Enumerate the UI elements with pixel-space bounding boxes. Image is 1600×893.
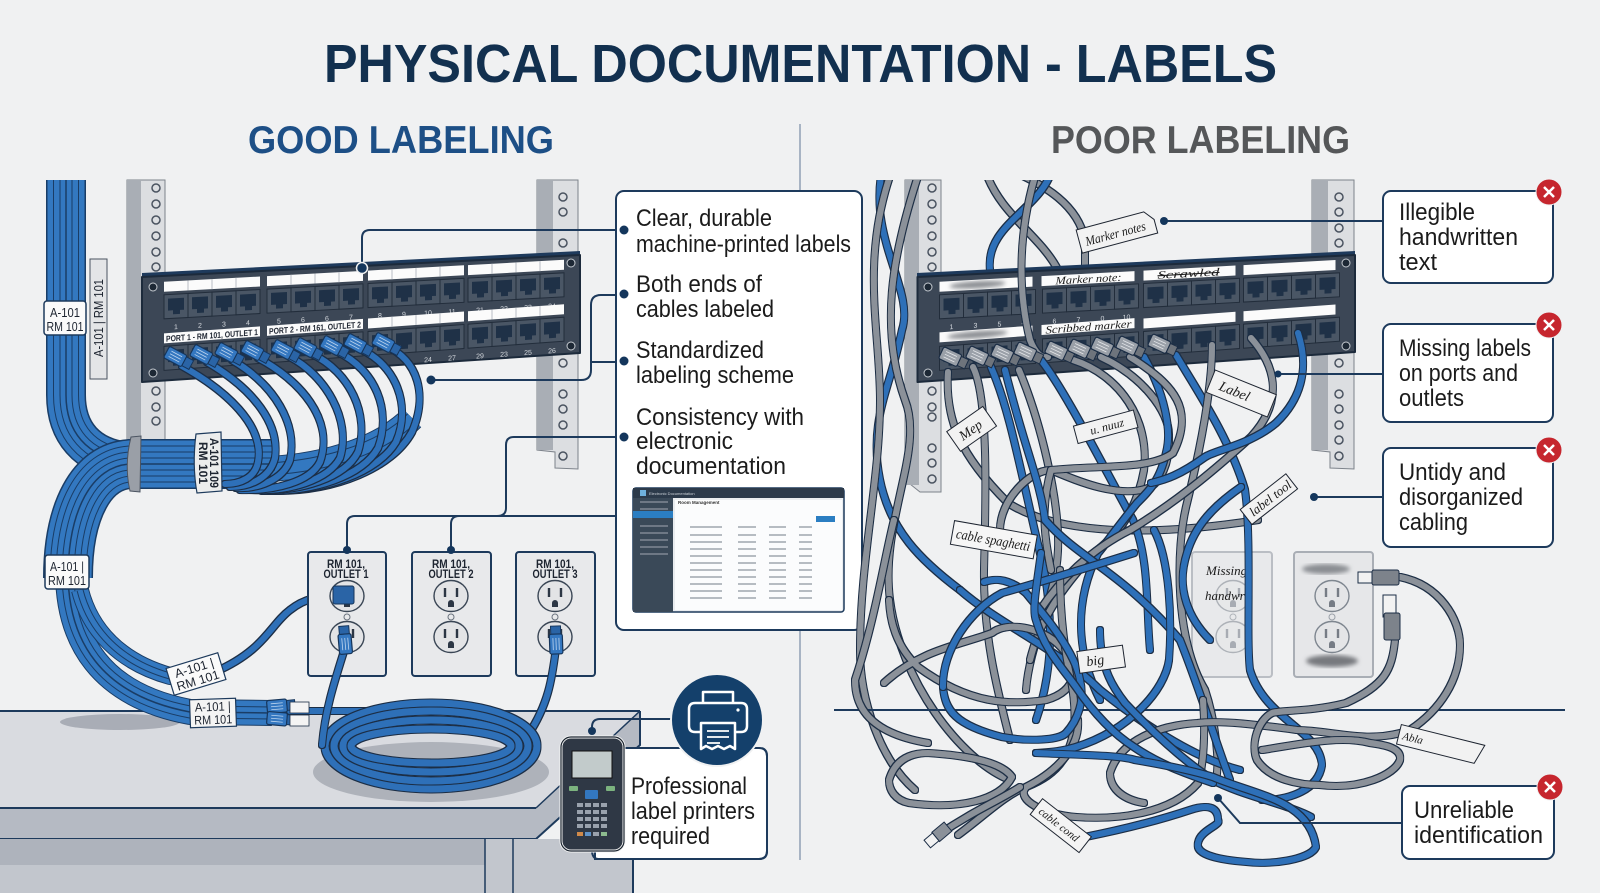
software screenshot thumbnail <box>633 488 844 612</box>
patch panel, poor side <box>917 251 1355 382</box>
callout: good labeling points: Consistency with <box>636 404 804 431</box>
outlets, poor side <box>1192 552 1373 677</box>
vertical cable bundle <box>66 175 130 462</box>
bottom port row <box>164 304 564 383</box>
patch panel, poor side: 4 <box>1022 320 1026 327</box>
tag: mep <box>947 406 997 451</box>
top port row: 6 <box>325 316 329 323</box>
patch panel, poor side: Scribbed marker <box>1046 318 1132 337</box>
handwritten tags <box>947 210 1485 853</box>
callout: unreliable identification: identification <box>1414 822 1543 849</box>
leader dots, good side <box>343 262 455 554</box>
loose plugs right outlet <box>1358 570 1400 640</box>
bottom port row: 29 <box>476 353 484 361</box>
callout: illegible handwritten text: Illegible <box>1399 199 1475 226</box>
top port row: 11 <box>448 309 456 316</box>
cable flag label A: A-101 | <box>173 656 215 681</box>
tag: floor label <box>1397 725 1485 765</box>
floor line <box>834 709 1565 711</box>
tag: label tool: label tool <box>1246 477 1295 519</box>
tag: big <box>1077 645 1125 673</box>
top port row: 3 <box>222 321 226 329</box>
callout: professional label printers: label printers <box>631 798 755 825</box>
callout: untidy cabling: disorganized <box>1399 484 1523 511</box>
icon: printer <box>671 674 763 766</box>
rack rail right, poor side <box>1312 180 1354 469</box>
callout: illegible handwritten text: handwritten <box>1399 224 1518 251</box>
patch panel, poor side: 10 <box>1123 314 1130 322</box>
leader lines, good side <box>347 230 624 550</box>
icon: red x badge 1 <box>1536 179 1562 205</box>
outlet 1 <box>308 552 386 676</box>
outlet 3 <box>516 552 595 676</box>
tag: marker notes: Marker notes <box>1083 218 1147 249</box>
wrap label on vertical bundle <box>44 301 86 335</box>
wrap label on lower bundle: RM 101 <box>48 574 86 588</box>
callout: unreliable identification <box>1402 786 1554 859</box>
callout: missing labels: on ports and <box>1399 360 1518 387</box>
top port row: 1 <box>174 324 178 331</box>
outlet 2: OUTLET 2 <box>428 569 474 581</box>
top port row: 21 <box>476 307 484 315</box>
tag: cable conn: cable cond <box>1036 806 1082 845</box>
callout: untidy cabling: cabling <box>1399 509 1468 536</box>
rotated bundle label: RM 101 <box>196 442 210 484</box>
patch panel, poor side: 0 <box>1101 316 1105 323</box>
outlets, poor side: Missing <box>1205 563 1248 578</box>
tangled cables <box>855 170 1460 863</box>
horizontal cable bundle <box>68 418 412 713</box>
callout: missing labels: outlets <box>1399 385 1464 412</box>
callout: professional label printers: required <box>631 823 710 850</box>
outlet 3: OUTLET 3 <box>532 569 578 581</box>
callout: good labeling points: electronic <box>636 428 733 455</box>
callout: good labeling points: labeling scheme <box>636 362 794 389</box>
tag: scrawl: u. nuuz <box>1088 415 1126 438</box>
tag: scrawl <box>1073 410 1138 443</box>
title: PHYSICAL DOCUMENTATION - LABELS <box>324 34 1277 94</box>
tag: mep: Mep <box>956 418 986 445</box>
tag: label <box>1206 370 1276 417</box>
cable to outlet 1 <box>215 596 335 672</box>
callout: unreliable identification: Unreliable <box>1414 797 1514 824</box>
callout: untidy cabling: Untidy and <box>1399 459 1506 486</box>
desk <box>0 711 640 893</box>
callout: illegible handwritten text: text <box>1399 249 1437 276</box>
top port row: 6 <box>301 317 305 324</box>
cable flag label A <box>166 653 226 695</box>
faded outlet <box>1192 552 1272 677</box>
cables behind panel <box>860 170 1085 790</box>
software screenshot thumbnail: Room Management <box>678 500 720 505</box>
cable flag label B <box>190 698 236 728</box>
cable flag label B: A-101 | <box>195 699 231 715</box>
tag: cable conn <box>1030 799 1091 853</box>
cable flag label B: RM 101 <box>194 712 233 728</box>
callout: good labeling points: Both ends of <box>636 271 762 298</box>
patch panel, poor side: 7 <box>1077 317 1081 324</box>
RJ45 plugs on patch panel <box>163 332 402 371</box>
smudged outlet <box>1294 552 1373 677</box>
tag: cable spaghetti: cable spaghetti <box>955 527 1031 555</box>
patch panel, good side <box>142 251 580 383</box>
patch cables looping into bundle <box>182 346 420 491</box>
wall outlet plates, good side <box>308 552 595 676</box>
patch panel, poor side: 3 <box>974 323 978 330</box>
bottom port row: PORT 1 - RM 101, OUTLET 1 <box>166 327 258 344</box>
bottom port row: 23 <box>500 351 508 359</box>
top port row: 5 <box>277 318 281 326</box>
wrap label on vertical bundle: A-101 <box>50 306 80 320</box>
callout: good labeling points: machine-printed labels <box>636 231 851 258</box>
top port row: 4 <box>246 320 250 327</box>
rotated bundle label: A-101 109 <box>207 438 221 488</box>
icon: red x badge 3 <box>1536 437 1562 463</box>
leader dots, poor side <box>1160 217 1318 802</box>
bottom port row: 25 <box>524 350 532 357</box>
bottom port row: 26 <box>548 348 556 355</box>
outlet 3: RM 101, <box>536 559 574 571</box>
rack rail left, poor side <box>905 180 941 492</box>
callout: missing labels <box>1383 324 1553 422</box>
heading: good labeling: GOOD LABELING <box>248 119 554 162</box>
callout: good labeling points <box>616 191 862 630</box>
callout: missing labels: Missing labels <box>1399 335 1531 362</box>
center divider <box>799 124 801 860</box>
callout: untidy cabling <box>1383 448 1553 547</box>
vertical printed label: A-101 | RM 101 <box>92 279 106 357</box>
top port row: 23 <box>524 305 532 312</box>
callout: good labeling points: Standardized <box>636 337 764 364</box>
bottom port row: 27 <box>448 355 456 363</box>
leader lines, poor side <box>1164 221 1403 823</box>
software screenshot thumbnail: Electronic Documentation <box>649 491 695 496</box>
rack rail left, good side <box>127 180 165 442</box>
top port row: 24 <box>548 303 556 311</box>
wrap label on lower bundle: A-101 | <box>50 560 84 574</box>
outlet 2: RM 101, <box>432 559 470 571</box>
patch panel, poor side: Marker note: <box>1054 272 1122 287</box>
tag: floor label: Abla <box>1400 730 1425 747</box>
printer leader <box>592 719 674 731</box>
bottom port row: 24 <box>424 357 432 364</box>
patch panel, poor side: 1 <box>950 324 954 331</box>
top port row: 2 <box>198 323 202 330</box>
outlets, poor side: handwri <box>1205 588 1249 603</box>
bottom port row: PORT 2 - RM 161, OUTLET 2 <box>269 320 361 336</box>
top port row: 9 <box>402 311 406 319</box>
loose connector on floor <box>923 822 952 849</box>
patch panel, poor side: 5 <box>998 321 1002 329</box>
rotated bundle label <box>194 432 222 493</box>
callout: good labeling points: cables labeled <box>636 296 774 323</box>
loose plugs by desk <box>266 698 309 727</box>
icon: red x badge 2 <box>1536 312 1562 338</box>
vertical printed label <box>90 259 107 379</box>
wrap label on lower bundle <box>45 555 89 589</box>
patch panel, poor side: 6 <box>1053 318 1057 326</box>
rack rail right, good side <box>537 180 578 469</box>
top port row: 22 <box>500 306 508 313</box>
heading: poor labeling: POOR LABELING <box>1051 119 1350 162</box>
callout: illegible handwritten text <box>1383 191 1553 283</box>
icon: red x badge 4 <box>1537 774 1563 800</box>
patch panel, poor side: Scrawled <box>1158 266 1220 282</box>
outlet 1: RM 101, <box>327 559 365 571</box>
callout: professional label printers: Professional <box>631 773 747 800</box>
callout: professional label printers <box>592 748 767 859</box>
tag: label: Label <box>1216 379 1252 405</box>
coiled blue cable <box>290 648 556 789</box>
bundle strap <box>127 436 141 492</box>
plugs on poor panel <box>938 334 1178 370</box>
top port row: 10 <box>424 310 432 317</box>
cable flag label A: RM 101 <box>175 668 221 694</box>
top port row <box>164 260 564 332</box>
icon: handheld label printer <box>561 727 624 851</box>
plugs in outlets <box>337 625 563 655</box>
tag: big: big <box>1085 653 1105 670</box>
callout: good labeling points: documentation <box>636 453 786 480</box>
tag: marker notes <box>1076 210 1158 253</box>
callout: good labeling points: Clear, durable <box>636 205 772 232</box>
outlet 2 <box>412 552 491 676</box>
outlet 1: OUTLET 1 <box>324 569 369 581</box>
top port row: 8 <box>378 313 382 320</box>
top port row: 7 <box>349 314 353 322</box>
wrap label on vertical bundle: RM 101 <box>46 320 84 334</box>
